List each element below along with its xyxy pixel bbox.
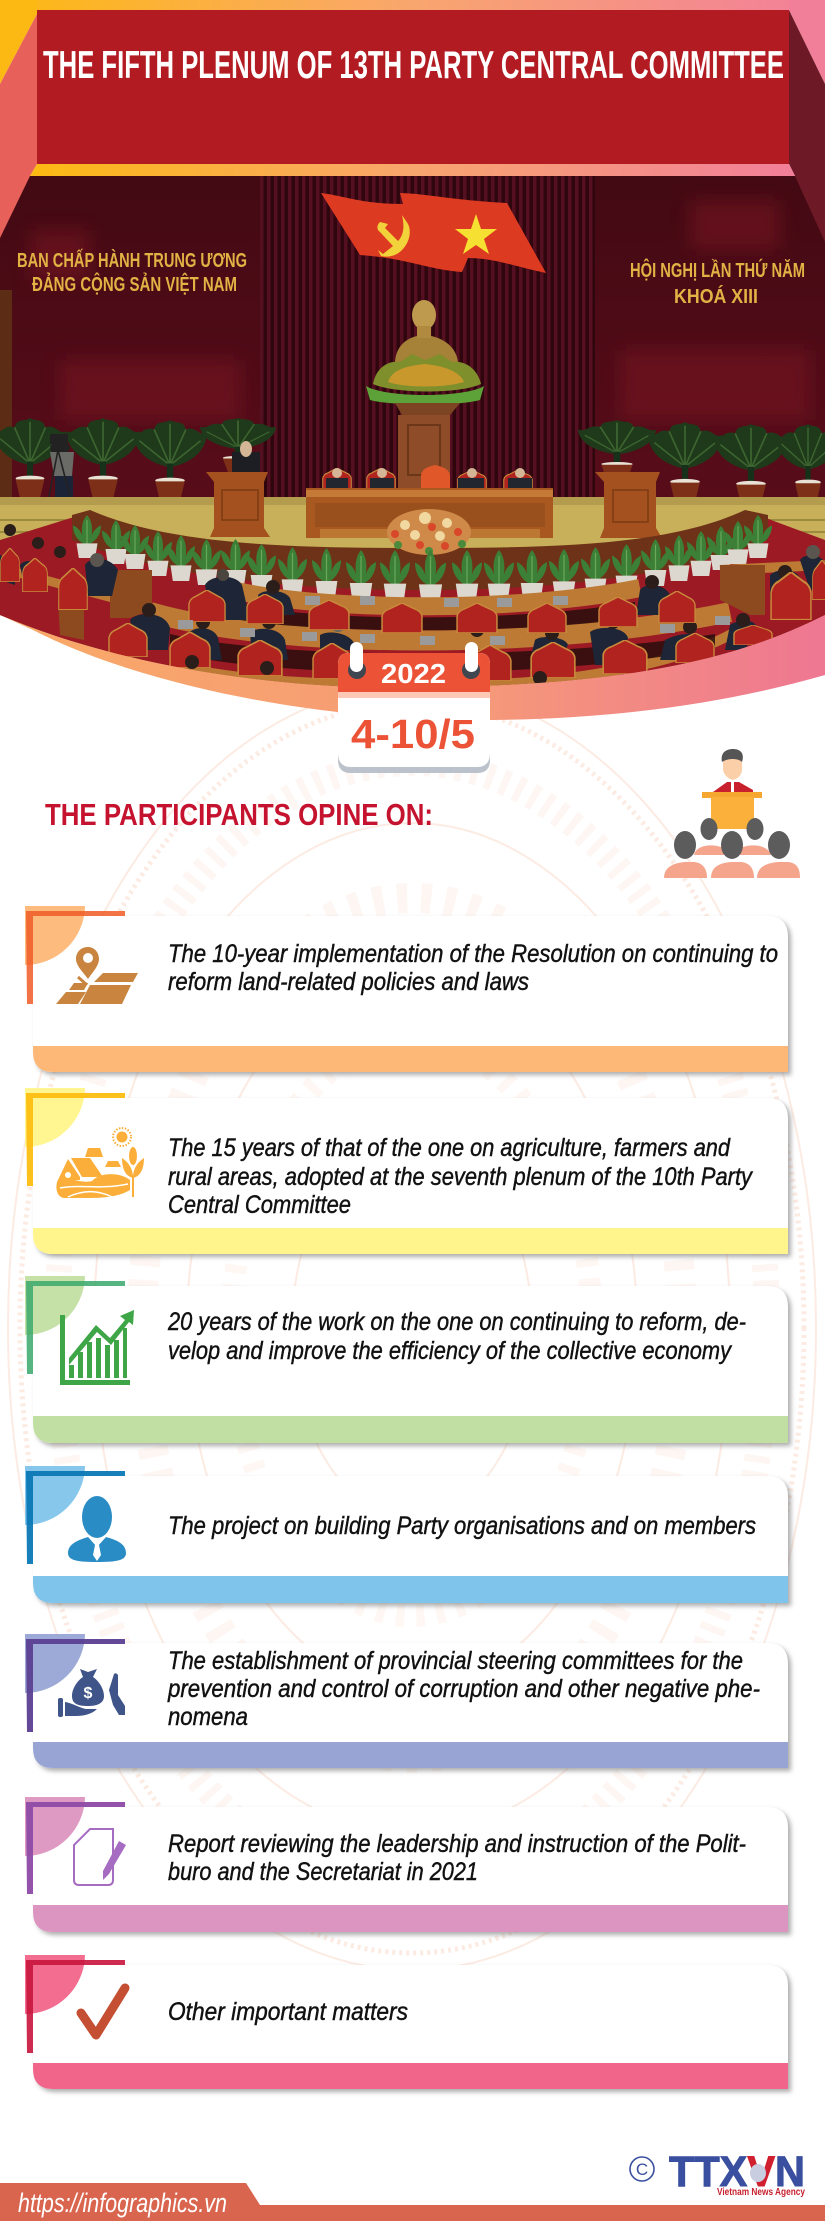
photo banner lettering: ĐẢNG CỘNG SẢN VIỆT NAM xyxy=(32,272,237,296)
logo: TTXVN: Vietnam News Agency xyxy=(717,2187,805,2198)
calendar badge: 4-10/5 xyxy=(351,711,475,757)
icon: document and pencil xyxy=(74,1829,126,1885)
top gradient bar xyxy=(0,0,825,10)
logo: TTXVN: C xyxy=(636,2160,648,2179)
right lectern xyxy=(595,472,662,538)
text xyxy=(168,940,778,996)
text: The establishment of provincial steering committees for the xyxy=(168,1647,743,1675)
curved delegate desks xyxy=(0,565,825,685)
curved ribbon under photo xyxy=(0,615,825,720)
wood strip left xyxy=(0,290,12,500)
website link: https://infographics.vn xyxy=(18,2188,227,2218)
head table seats xyxy=(322,465,533,488)
logo: TTXVN: TTXVN xyxy=(669,2148,805,2196)
photo banner lettering xyxy=(17,249,805,308)
text: prevention and control of corruption and other negative phe- xyxy=(167,1675,760,1703)
panel: collective economy xyxy=(25,1276,788,1443)
text xyxy=(167,1308,746,1365)
text xyxy=(168,1134,753,1219)
panel: party organisations xyxy=(25,1466,788,1603)
icon: map pin and land xyxy=(56,947,138,1004)
row of potted plants xyxy=(73,515,772,602)
panel: other matters xyxy=(25,1955,788,2089)
cameraman xyxy=(48,434,74,497)
left ribbon fold xyxy=(0,0,37,238)
icon: growth chart xyxy=(60,1310,134,1385)
text xyxy=(168,1830,746,1886)
text: velop and improve the efficiency of the collective economy xyxy=(168,1337,732,1365)
text: The project on building Party organisations and on members xyxy=(168,1512,756,1540)
text: buro and the Secretariat in 2021 xyxy=(168,1858,478,1886)
desk fronts dark xyxy=(170,602,715,673)
icon: money bag and refusing hand xyxy=(58,1669,125,1717)
text: nomena xyxy=(168,1703,248,1731)
lower floor carpet xyxy=(0,517,825,700)
text: rural areas, adopted at the seventh plenum of the 10th Party xyxy=(168,1163,753,1191)
footer bar xyxy=(0,2183,825,2221)
left side desk block xyxy=(58,565,765,640)
icon: money bag and refusing hand: $ xyxy=(84,1685,93,1702)
panel: anti-corruption committees xyxy=(25,1634,788,1768)
icon: check mark xyxy=(81,1988,125,2035)
icon: person in suit xyxy=(68,1496,126,1562)
calendar badge xyxy=(338,642,490,773)
panel: land policy xyxy=(25,906,788,1072)
right ribbon fold xyxy=(789,0,825,242)
head table xyxy=(306,488,553,538)
title banner xyxy=(37,10,789,164)
text: The 15 years of that of the one on agriculture, farmers and xyxy=(168,1134,731,1162)
flower arrangement on column xyxy=(366,354,484,493)
text: reform land-related policies and laws xyxy=(168,968,529,996)
lower gradient bar xyxy=(30,164,795,176)
stage front wall xyxy=(72,510,768,590)
icon: speaker at podium with audience xyxy=(664,749,800,878)
wall mottling xyxy=(30,200,810,420)
Ho Chi Minh statue xyxy=(395,300,458,362)
text: 20 years of the work on the one on continuing to reform, de- xyxy=(167,1308,746,1336)
panel: agriculture xyxy=(25,1088,788,1254)
text: Central Committee xyxy=(168,1191,351,1219)
drum background watermark xyxy=(8,686,816,1970)
delegate chairs xyxy=(0,548,825,681)
left lectern with speaker xyxy=(206,441,270,537)
stage floor xyxy=(0,505,825,548)
curtain xyxy=(260,176,595,501)
photo banner lettering: BAN CHẤP HÀNH TRUNG ƯƠNG xyxy=(17,249,247,272)
palms left and right xyxy=(0,418,825,497)
text: Other important matters xyxy=(168,1998,408,2026)
desk microphones xyxy=(178,596,730,645)
photo banner lettering: KHOÁ XIII xyxy=(674,285,758,308)
panel: Politburo report xyxy=(25,1797,788,1932)
delegates xyxy=(0,524,825,665)
text: Report reviewing the leadership and instruction of the Polit- xyxy=(168,1830,746,1858)
heading: the participants: THE PARTICIPANTS OPINE ON: xyxy=(45,797,433,832)
icon: farm xyxy=(56,1128,144,1198)
party flag xyxy=(321,193,546,273)
text xyxy=(167,1647,760,1731)
hall photo xyxy=(0,176,825,700)
calendar badge: 2022 xyxy=(381,658,446,689)
central flower bouquet xyxy=(387,509,471,555)
heads in front row xyxy=(185,655,547,685)
